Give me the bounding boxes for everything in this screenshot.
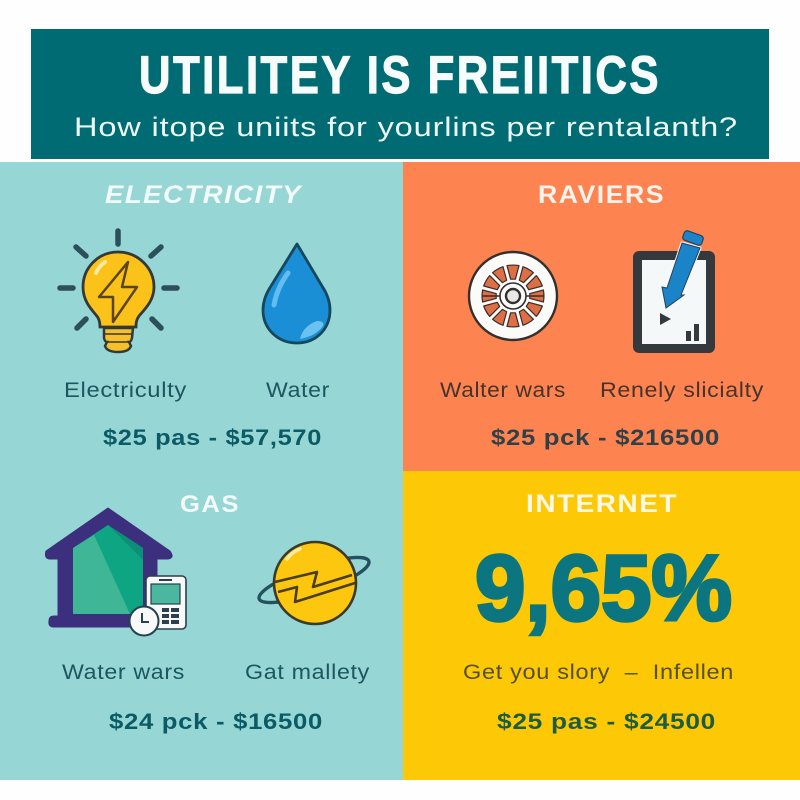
price: internet: $25 pas - $24500: [497, 709, 716, 734]
heading: electricity: ELECTRICITY: [105, 181, 303, 209]
panel: ravers: [403, 162, 800, 471]
label: walter wars: Walter wars: [440, 379, 566, 402]
icon: light bulb: [60, 231, 177, 352]
header banner: [31, 29, 769, 159]
label: water: Water: [266, 379, 330, 402]
label: renely slicialty: Renely slicialty: [600, 379, 764, 402]
label: water wars: Water wars: [62, 661, 185, 684]
panel: electricity and gas: [0, 162, 403, 780]
title: UTILITEY IS FREIITICS: [139, 46, 661, 105]
label: electricity: Electriculty: [64, 379, 187, 402]
heading: internet: INTERNET: [526, 490, 678, 518]
icon: wheel: [469, 252, 557, 340]
big stat: 9,65%: [475, 536, 732, 640]
label: internet: Get you slory – Infellen: [463, 661, 734, 684]
phone: [146, 576, 186, 629]
icon: clipboard with pen: [633, 230, 715, 353]
icon: ringed planet: [255, 542, 373, 624]
icon: water drop: [263, 244, 330, 343]
price: gas: $24 pck - $16500: [109, 709, 323, 734]
icon: house with phone and clock: [45, 508, 186, 636]
heading: raviers: RAVIERS: [538, 181, 665, 209]
label: gat mallety: Gat mallety: [245, 661, 370, 684]
price: ravers: $25 pck - $216500: [491, 425, 720, 450]
panel: internet: [403, 471, 800, 780]
heading: gas: GAS: [180, 491, 240, 518]
price: electricity: $25 pas - $57,570: [103, 425, 322, 450]
clock: [130, 606, 158, 636]
subtitle: How itope uniits for yourlins per rentalanth?: [74, 112, 738, 142]
